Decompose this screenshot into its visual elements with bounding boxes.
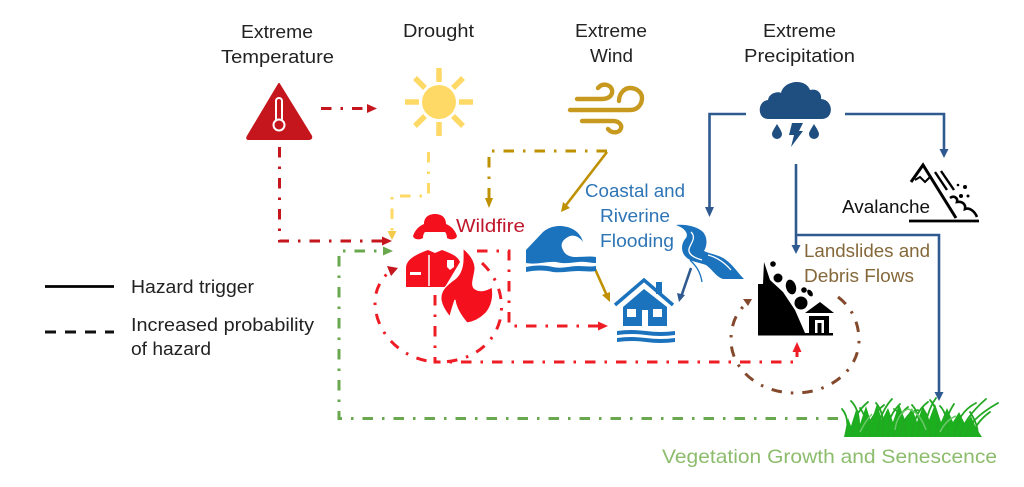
arrow: temperature to wildfire [280,147,392,246]
label: Coastal and Riverine Flooding: Flooding [600,231,674,251]
heading: Extreme Wind: Wind [590,46,633,66]
arrow: wind to wildfire [485,151,607,208]
arrow: vegetation to wildfire [339,246,838,418]
icon: thermometer warning triangle [247,84,311,139]
heading: Extreme Precipitation: Precipitation [744,46,855,66]
legend: increased probability of hazard: of hazard [131,339,211,359]
arrow: precipitation to flooding [705,114,746,217]
legend: increased probability of hazard: Increased probability [131,315,314,335]
heading: Extreme Temperature [221,22,334,67]
label: Avalanche: Avalanche [842,197,930,217]
icon: river [676,225,744,282]
arrow: wildfire to landslides [435,295,802,362]
legend: hazard trigger: Hazard trigger [131,277,254,297]
heading: Extreme Wind [575,21,647,66]
arrow: temperature to drought [321,104,377,113]
icon: avalanche mountain [909,165,979,221]
label: Coastal and Riverine Flooding: Coastal and [585,181,685,201]
icon: firefighter [406,214,460,287]
arrow: precipitation to vegetation [796,235,944,401]
icon: wind [570,85,642,132]
heading: Extreme Temperature: Temperature [221,47,334,67]
arrow: river to house [677,268,691,302]
icon: grass [842,398,998,437]
arrow: wildfire to flooding [477,251,608,330]
arrow: wave to house [595,269,610,302]
icon: landslide [758,261,834,336]
arrow: wind to coastal flooding [561,152,607,212]
label: Coastal and Riverine Flooding: Riverine [600,206,670,226]
arrow: drought to wildfire [388,152,428,240]
label: Landslides and Debris Flows [804,241,930,286]
heading: Drought: Drought [403,21,474,41]
icon: flooded house [615,280,675,343]
legend: increased probability of hazard [45,315,314,359]
label: Wildfire: Wildfire [456,216,525,236]
arrow: landslide feedback loop [731,297,859,393]
icon: coastal wave [526,226,596,272]
label: Landslides and Debris Flows: Landslides and [804,241,930,261]
arrow: precipitation to landslides [792,164,800,254]
arrow: wildfire self-reinforcing loop [375,263,501,362]
icon: wildfire flame [441,248,493,323]
icon: sun [405,68,473,136]
heading: Extreme Precipitation [744,21,855,66]
icon: storm cloud [760,82,831,147]
arrow: precipitation to avalanche [845,114,948,158]
label: Coastal and Riverine Flooding [585,181,685,251]
heading: Extreme Precipitation: Extreme [763,21,836,41]
heading: Extreme Temperature: Extreme [241,22,313,42]
label: Landslides and Debris Flows: Debris Flows [804,266,914,286]
label: Vegetation Growth and Senescence: Vegetation Growth and Senescence [662,446,997,468]
heading: Extreme Wind: Extreme [575,21,647,41]
